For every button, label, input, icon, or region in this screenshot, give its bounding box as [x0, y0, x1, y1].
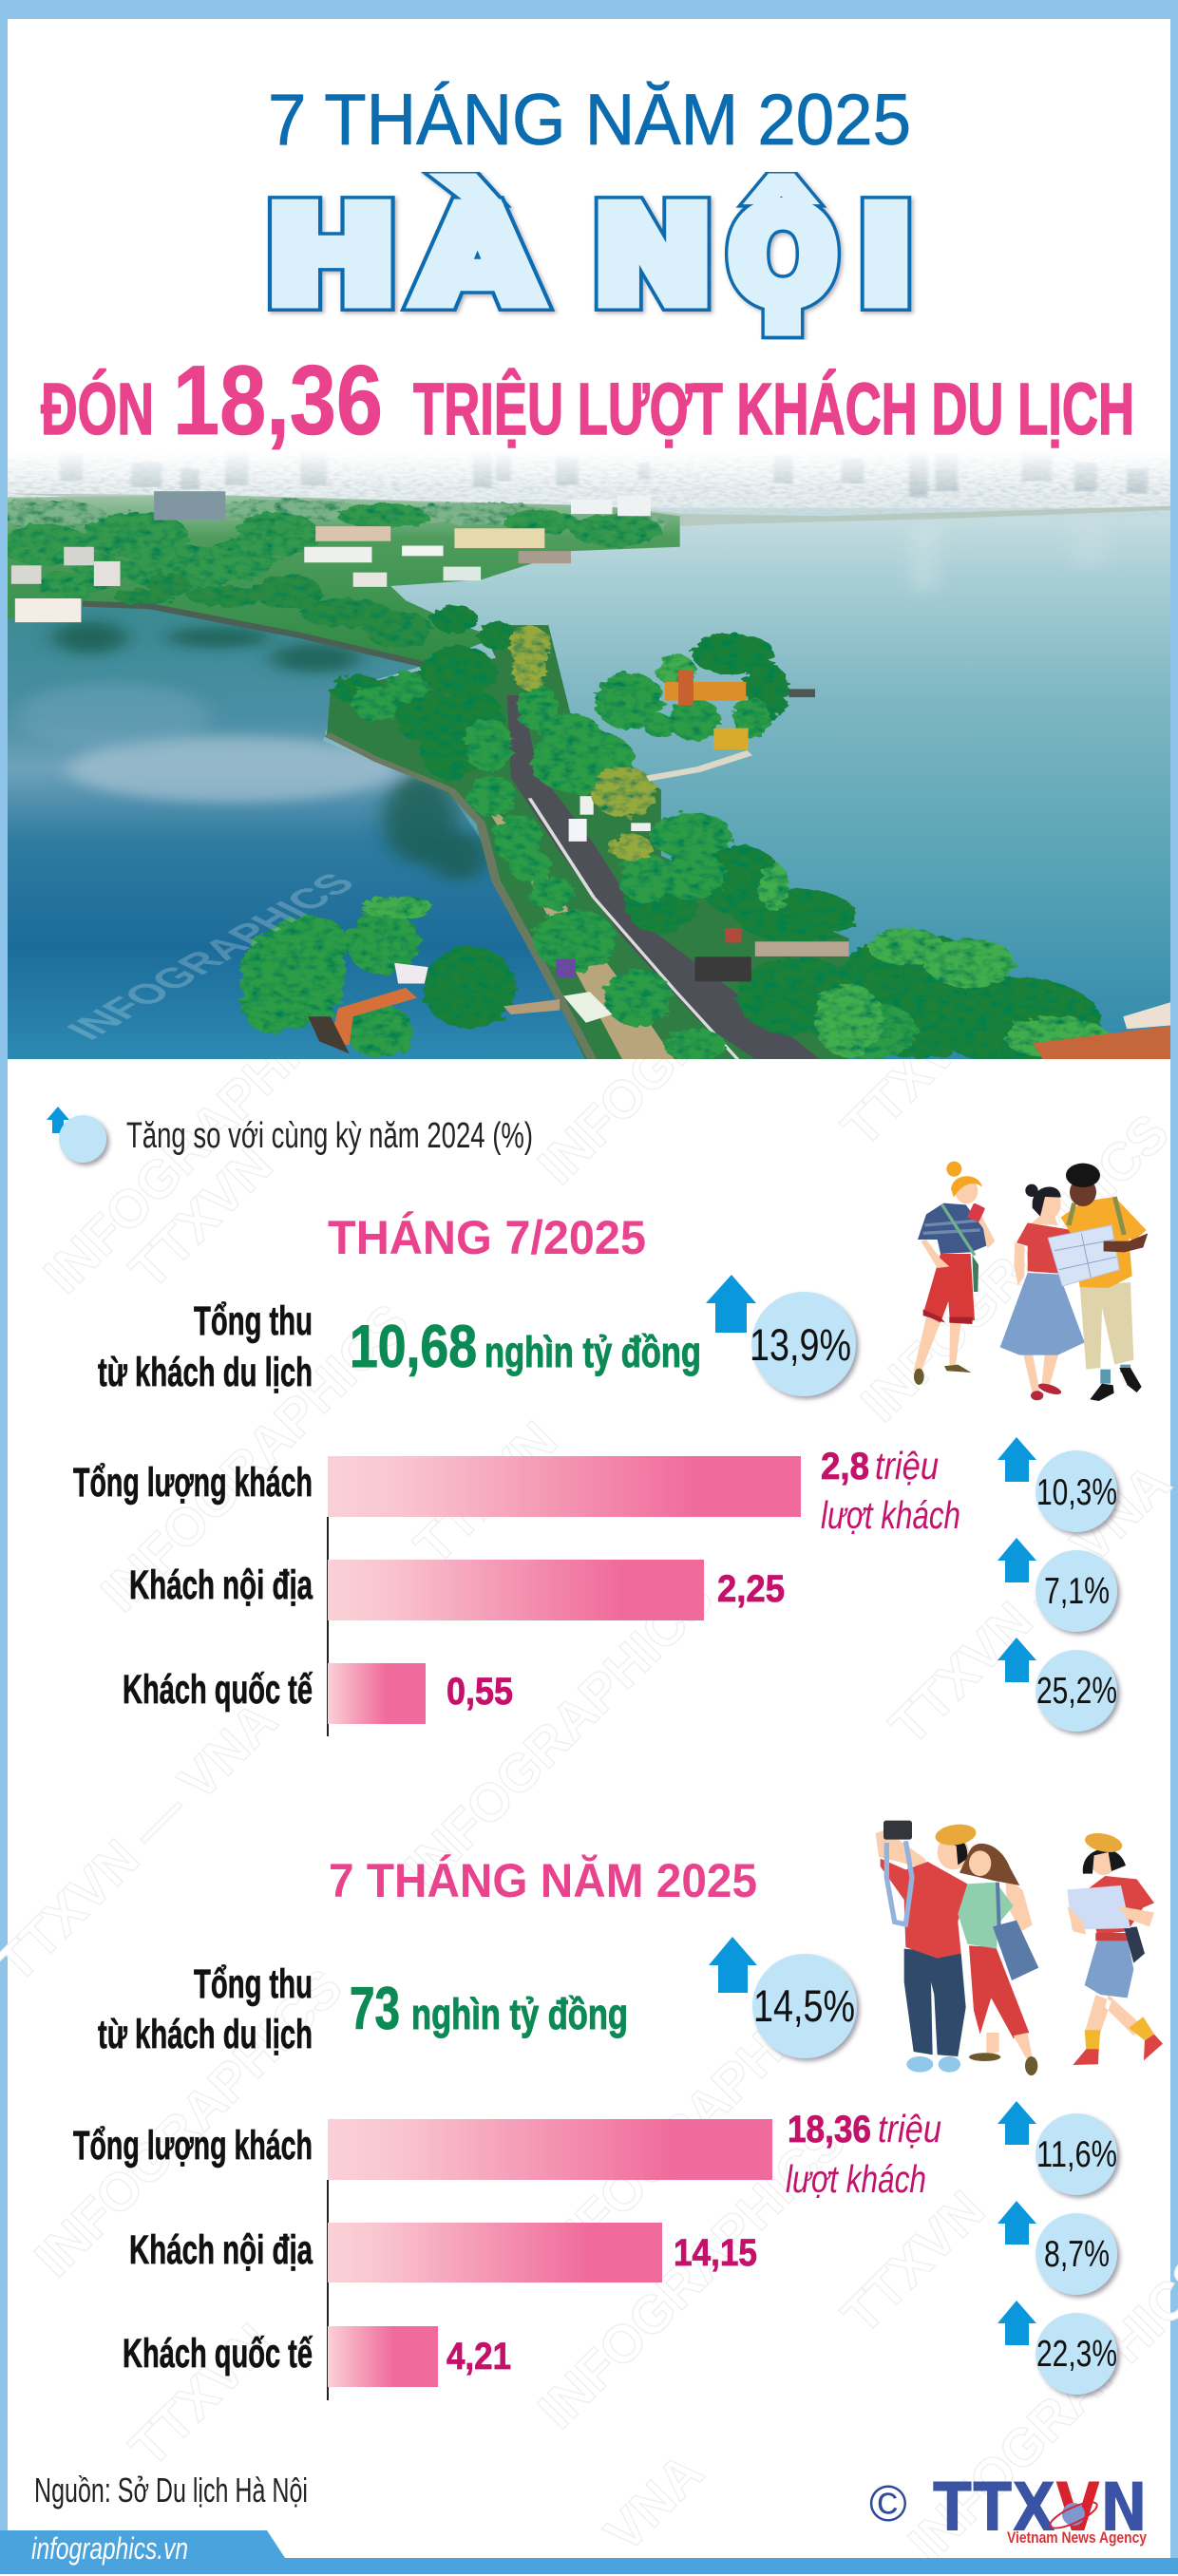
source note: Nguồn: Sở Du lịch Hà Nội: [34, 2471, 308, 2510]
watermarks: INFOGRAPHICS: [526, 1957, 857, 2287]
title: HÀ NỘI: N: [593, 180, 712, 331]
bar: total visitors: [73, 1444, 960, 1537]
watermarks: TTXVN: [830, 992, 996, 1157]
stat block: seven-month revenue: [98, 1937, 857, 2058]
subtitle: ĐÓN 18,36 TRIỆU LƯỢT KHÁCH DU LỊCH: 18,36: [173, 346, 383, 456]
title: HÀ NỘI: À: [417, 180, 538, 332]
watermarks: TTXVN: [118, 2312, 283, 2477]
bar: total visitors: lượt khách: [821, 1493, 960, 1537]
photo: West Lake aerial view: [0, 427, 1178, 1064]
title: HÀ NỘI: Ộ: [729, 180, 837, 331]
logo: TTXVN Vietnam News Agency: Vietnam News Agency: [1007, 2529, 1147, 2547]
bar chart: July 2025 visitors: [73, 1444, 960, 1736]
bar chart: seven-month visitors: [73, 2107, 941, 2400]
watermarks: INFOGRAPHICS: [23, 1957, 353, 2287]
watermarks: INFOGRAPHICS: [526, 864, 857, 1195]
revenue value: nghìn tỷ đồng: [484, 1328, 701, 1376]
revenue label: Tổng thu: [194, 1298, 313, 1344]
title: HÀ NỘI: H: [266, 180, 397, 332]
heading: THÁNG 7/2025: THÁNG 7/2025: [328, 1211, 646, 1264]
legend: increase versus same period 2024: [47, 1107, 533, 1163]
title: HÀ NỘI: I: [859, 181, 913, 332]
revenue label: [98, 1298, 313, 1395]
growth badge: 8,7%: [998, 2201, 1117, 2295]
revenue label: Tổng thu: [194, 1961, 313, 2007]
bar: total visitors: triệu: [875, 1444, 939, 1487]
bar: international visitors: [123, 1663, 513, 1724]
bar: international visitors: 0,55: [446, 1671, 513, 1713]
subtitle: ĐÓN 18,36 TRIỆU LƯỢT KHÁCH DU LỊCH: ĐÓN: [41, 369, 154, 450]
title: HÀ NỘI: À: [417, 180, 538, 332]
growth badge: 10,3%: [998, 1437, 1117, 1532]
growth badge: 11,6%: [998, 2101, 1117, 2195]
revenue growth badge: 14,5%: [753, 1980, 855, 2031]
revenue value: nghìn tỷ đồng: [411, 1990, 628, 2038]
title: HÀ NỘI: H: [266, 180, 397, 332]
watermarks: [0, 864, 1178, 2572]
heading: 7 THÁNG NĂM 2025: 7 THÁNG NĂM 2025: [329, 1854, 757, 1907]
bar: total visitors: triệu: [878, 2107, 941, 2150]
revenue growth badge: [709, 1937, 857, 2058]
title: HÀ NỘI: [266, 180, 913, 332]
growth badge: 25,2%: 25,2%: [1036, 1671, 1117, 1712]
growth badge: 7,1%: [998, 1538, 1117, 1632]
revenue label: từ khách du lịch: [98, 1350, 313, 1395]
growth badge: 8,7%: 8,7%: [1044, 2234, 1110, 2275]
watermarks: TTXVN: [403, 1410, 568, 1575]
bar: domestic visitors: Khách nội địa: [129, 2227, 314, 2273]
revenue growth badge: [706, 1275, 856, 1396]
bar: domestic visitors: Khách nội địa: [129, 1563, 314, 1608]
bar: international visitors: [123, 2326, 511, 2387]
bar: total visitors: 2,8: [821, 1446, 869, 1487]
bar: international visitors: Khách quốc tế: [123, 1667, 313, 1713]
watermarks: TTXVN — VNA: [878, 1452, 1178, 1755]
subtitle: ĐÓN 18,36 TRIỆU LƯỢT KHÁCH DU LỊCH: [41, 346, 1134, 456]
bar: total visitors: 18,36: [788, 2109, 871, 2150]
revenue value: 73: [350, 1976, 400, 2042]
bar: domestic visitors: [129, 1560, 785, 1620]
growth badge: 10,3%: 10,3%: [1036, 1472, 1117, 1513]
growth badge: 11,6%: 11,6%: [1036, 2134, 1117, 2175]
watermarks: INFOGRAPHICS: [849, 1102, 1178, 1432]
illustration: three tourists with map: [914, 1162, 1148, 1401]
title line: 7 THÁNG NĂM 2025: 7 THÁNG NĂM 2025: [268, 80, 911, 161]
watermarks: INFOGRAPHICS: [32, 974, 363, 1304]
growth badge: 22,3%: 22,3%: [1036, 2334, 1117, 2375]
revenue label: [98, 1961, 313, 2057]
photo: West Lake aerial view: INFOGRAPHICS: [57, 867, 366, 1046]
bar: total visitors: [73, 2107, 941, 2201]
illustration: tourists with camera and map: [876, 1821, 1163, 2075]
watermarks: TTXVN: [830, 2179, 996, 2344]
footer band with website: infographics.vn: [31, 2531, 188, 2566]
bar: total visitors: Tổng lượng khách: [73, 1460, 313, 1506]
growth badge: 22,3%: [998, 2301, 1117, 2395]
bar: total visitors: lượt khách: [786, 2157, 926, 2201]
revenue value: 10,68: [350, 1314, 477, 1380]
revenue value: [350, 1976, 628, 2042]
revenue value: [350, 1314, 701, 1380]
title: HÀ NỘI: N: [593, 180, 712, 331]
revenue label: từ khách du lịch: [98, 2012, 313, 2057]
watermarks: TTXVN: [118, 1134, 283, 1299]
bar: domestic visitors: [129, 2223, 757, 2282]
title: HÀ NỘI: Ộ: [729, 180, 837, 331]
bar: domestic visitors: 14,15: [674, 2232, 757, 2274]
watermarks: VNA: [593, 2441, 714, 2563]
title: HÀ NỘI: I: [859, 181, 913, 332]
stat block: monthly revenue: [98, 1275, 856, 1396]
footer band with website: [0, 2530, 1178, 2576]
watermarks: INFOGRAPHICS: [89, 1292, 420, 1622]
bar: domestic visitors: 2,25: [717, 1568, 785, 1610]
legend: increase versus same period 2024: Tăng so với cùng kỳ năm 2024 (%): [126, 1116, 533, 1156]
bar: international visitors: Khách quốc tế: [123, 2331, 313, 2377]
bar: total visitors: Tổng lượng khách: [73, 2123, 313, 2169]
watermarks: INFOGRAPHICS: [393, 1567, 724, 1898]
watermarks: INFOGRAPHICS: [526, 2109, 857, 2439]
growth badge: 25,2%: [998, 1638, 1117, 1732]
bar: international visitors: 4,21: [446, 2336, 511, 2377]
growth badge: 7,1%: 7,1%: [1044, 1571, 1110, 1612]
revenue growth badge: 13,9%: [750, 1319, 851, 1370]
copyright symbol: ©: [869, 2475, 907, 2532]
logo: TTXVN Vietnam News Agency: TTXVN: [933, 2469, 1148, 2547]
